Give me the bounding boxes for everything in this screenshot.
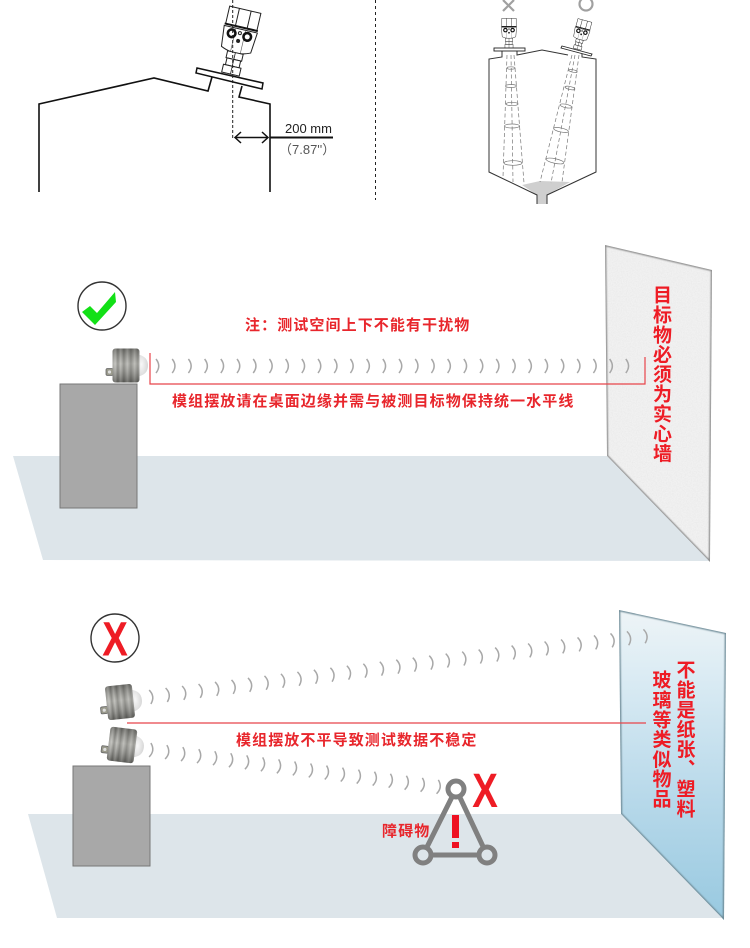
wall: glass target	[619, 610, 726, 920]
dimension leader	[270, 136, 333, 138]
signal waves	[156, 359, 629, 373]
red level line	[127, 722, 646, 724]
panel: incorrect placement	[28, 610, 726, 920]
silo outline	[489, 50, 596, 204]
floor overlap on wall	[612, 814, 722, 918]
arrow: distance to wall	[235, 132, 268, 143]
icon: circle mark	[580, 0, 592, 10]
note: test space: 注：测试空间上下不能有干扰物	[245, 316, 470, 334]
grey table	[60, 384, 137, 508]
material at silo bottom	[522, 181, 570, 204]
icon: radar sensor on flange	[196, 6, 263, 89]
panel: correct placement	[13, 245, 712, 562]
grey table	[73, 766, 150, 866]
red level line	[150, 353, 645, 384]
icon: red X in circle	[91, 614, 139, 667]
diagram: silo with wrong and right sensor orientation	[489, 0, 596, 204]
tank outline	[39, 77, 270, 192]
wall: solid target	[605, 245, 712, 562]
lower signal waves	[149, 743, 441, 794]
floor	[28, 814, 723, 918]
upper signal waves	[149, 629, 648, 704]
wall label: second column: 玻璃等类似物品	[650, 670, 671, 809]
icon: cross mark	[503, 0, 514, 11]
icon: obstacle warning triangle	[415, 781, 495, 863]
floor	[13, 456, 710, 561]
divider	[374, 0, 376, 200]
left sensor beam	[503, 55, 524, 183]
icon: tilted sensor up	[98, 683, 144, 721]
wall label: 目标物必须为实心墙	[650, 285, 672, 463]
icon: tilted sensor down	[100, 726, 146, 765]
dimension label: 200 mm: 200 mm	[285, 121, 332, 136]
floor overlap on wall	[600, 456, 708, 560]
icon: vertical sensor	[494, 18, 525, 51]
note: unstable data: 模组摆放不平导致测试数据不稳定	[236, 731, 478, 749]
icon: sensor module	[106, 348, 148, 382]
icon: red X in circle: X	[102, 614, 128, 667]
icon: obstacle red X: X	[472, 765, 498, 818]
wall label: first column: 不能是纸张、塑料	[674, 660, 695, 818]
center dashed line	[232, 0, 234, 140]
right sensor beam	[540, 55, 579, 183]
icon: green check in circle	[78, 282, 126, 330]
note: level placement: 模组摆放请在桌面边缘并需与被测目标物保持统一水平线	[172, 392, 575, 410]
obstacle label: 障碍物	[382, 822, 430, 840]
diagram: tank with sensor 200 mm from wall	[39, 0, 335, 192]
icon: tilted sensor	[561, 18, 592, 56]
dimension label: inches: （7.87''）	[279, 142, 335, 157]
